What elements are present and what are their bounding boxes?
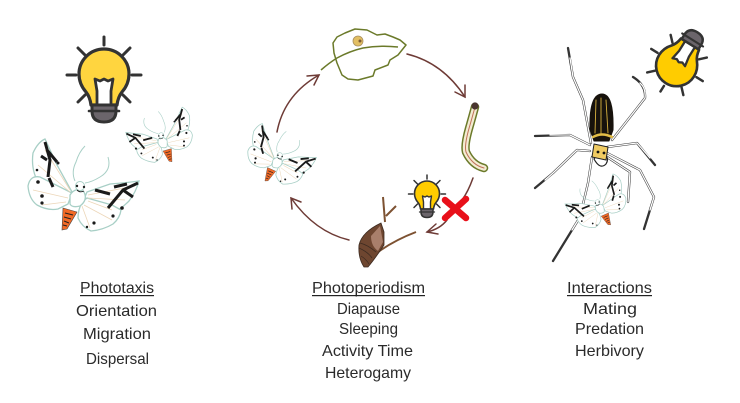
list item: activity time: Activity Time	[322, 343, 413, 360]
icon: leaf with egg	[321, 29, 406, 80]
icon: small moth	[126, 107, 192, 162]
icon: adult moth	[244, 122, 320, 188]
icon: spider	[535, 48, 655, 261]
icon: pupa on twig	[359, 197, 416, 267]
icon: light bulb phototaxis	[67, 37, 141, 122]
icon: red cross	[445, 199, 466, 218]
list item: diapause: Diapause	[337, 301, 400, 318]
text block: interactions	[567, 280, 652, 360]
icon: caterpillar	[466, 102, 484, 168]
icon: moth caught by spider	[562, 173, 629, 231]
icon: large moth	[28, 139, 139, 231]
heading: phototaxis: Phototaxis	[80, 280, 154, 297]
icon: small light bulb	[408, 175, 446, 218]
list item: dispersal: Dispersal	[86, 351, 149, 368]
heading: interactions: Interactions	[567, 280, 652, 297]
arrow: caterpillar to pupa	[427, 178, 473, 234]
list item: mating: Mating	[583, 301, 637, 318]
list item: migration: Migration	[83, 326, 151, 343]
list item: predation: Predation	[575, 321, 644, 338]
icon: tilted light bulb	[635, 16, 723, 108]
arrow: leaf to caterpillar	[407, 54, 465, 97]
arrow: pupa to moth	[291, 198, 349, 240]
list item: sleeping: Sleeping	[339, 321, 398, 338]
list item: heterogamy: Heterogamy	[325, 365, 411, 382]
list item: orientation: Orientation	[76, 303, 157, 320]
text block: photoperiodism	[312, 280, 425, 382]
life cycle diagram	[244, 29, 484, 267]
text block: phototaxis	[76, 280, 157, 368]
heading: photoperiodism: Photoperiodism	[312, 280, 425, 297]
arrow: moth to leaf	[277, 75, 319, 132]
list item: herbivory: Herbivory	[575, 343, 644, 360]
